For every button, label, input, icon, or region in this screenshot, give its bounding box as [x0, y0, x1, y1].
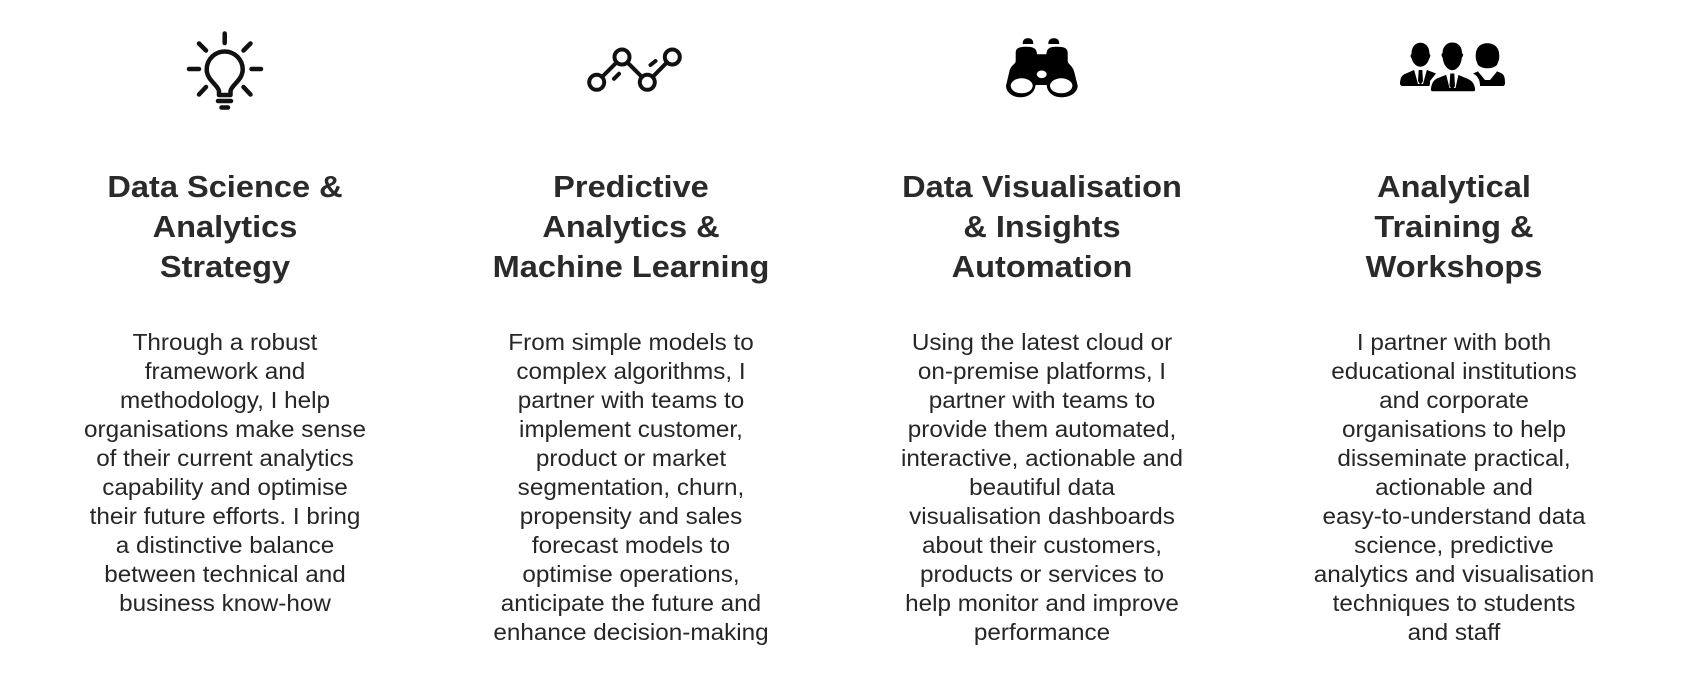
column 3 text: provide them automated,: [908, 416, 1176, 442]
column 1 text: business know-how: [119, 590, 330, 616]
column 1 text: organisations make sense: [84, 416, 365, 442]
column 2 text: segmentation, churn,: [518, 474, 744, 500]
column 1 heading: Strategy: [159, 249, 290, 284]
column 3 heading: Data Visualisation: [902, 169, 1182, 204]
column 4 text: disseminate practical,: [1337, 445, 1571, 471]
column 4 text: [1314, 329, 1594, 645]
column 3 text: performance: [974, 619, 1110, 645]
column 4 text: science, predictive: [1354, 532, 1554, 558]
column 2 heading: [493, 169, 769, 284]
column 3 text: beautiful data: [969, 474, 1115, 500]
column 3 text: on-premise platforms, I: [918, 358, 1166, 384]
column 2 heading: Predictive: [553, 169, 709, 204]
column 1 text: Through a robust: [132, 329, 317, 355]
column 3 heading: [902, 169, 1182, 284]
column 4 heading: Analytical: [1377, 169, 1531, 204]
column 4 text: and corporate: [1379, 387, 1529, 413]
column 1 text: between technical and: [104, 561, 345, 587]
column 3 text: Using the latest cloud or: [912, 329, 1172, 355]
column 3 text: interactive, actionable and: [901, 445, 1183, 471]
column 3 text: partner with teams to: [929, 387, 1155, 413]
column 4 text: educational institutions: [1331, 358, 1577, 384]
left man: [1400, 43, 1436, 86]
icon: binoculars: [1006, 38, 1078, 97]
column 1 text: [84, 329, 365, 616]
column 2 heading: Analytics &: [542, 209, 720, 244]
column 2 text: anticipate the future and: [501, 590, 761, 616]
column 4 heading: Training &: [1374, 209, 1534, 244]
column 4 text: I partner with both: [1357, 329, 1551, 355]
column 2 text: [493, 329, 769, 645]
column 3 heading: Automation: [952, 249, 1132, 284]
column 1 text: of their current analytics: [96, 445, 353, 471]
icons row: [186, 31, 1505, 110]
column 2 text: complex algorithms, I: [516, 358, 746, 384]
column 4 heading: Workshops: [1366, 249, 1542, 284]
centre man: [1430, 42, 1476, 92]
column 4 heading: [1366, 169, 1542, 284]
column 3 text: [901, 329, 1183, 645]
woman: [1473, 43, 1505, 86]
column 4 text: analytics and visualisation: [1314, 561, 1594, 587]
icon: three business people: [1400, 42, 1505, 92]
column 2 heading: Machine Learning: [493, 249, 769, 284]
column 2 text: partner with teams to: [518, 387, 744, 413]
column 1 text: a distinctive balance: [115, 532, 334, 558]
column 3 text: help monitor and improve: [905, 590, 1179, 616]
column 2 text: product or market: [536, 445, 726, 471]
column 1 text: methodology, I help: [119, 387, 329, 413]
column 4 text: easy-to-understand data: [1322, 503, 1586, 529]
column 4 text: organisations to help: [1342, 416, 1566, 442]
column 1 heading: Data Science &: [107, 169, 342, 204]
column 1 heading: [107, 169, 342, 284]
column 2 text: propensity and sales: [520, 503, 742, 529]
column 2 text: From simple models to: [508, 329, 754, 355]
column 3 text: products or services to: [920, 561, 1164, 587]
column 3 text: about their customers,: [922, 532, 1162, 558]
column 3 heading: & Insights: [963, 209, 1121, 244]
column 2 text: forecast models to: [532, 532, 730, 558]
column 2 text: optimise operations,: [522, 561, 740, 587]
column 1 text: their future efforts. I bring: [89, 503, 360, 529]
column 2 text: implement customer,: [519, 416, 743, 442]
column 2 text: enhance decision-making: [493, 619, 769, 645]
icon: line chart: [589, 50, 680, 90]
column 4 text: techniques to students: [1333, 590, 1575, 616]
column 4 text: actionable and: [1375, 474, 1533, 500]
column 4 text: and staff: [1408, 619, 1500, 645]
column 1 heading: Analytics: [152, 209, 297, 244]
icon: light bulb: [189, 34, 261, 108]
column 1 text: capability and optimise: [102, 474, 347, 500]
column 1 text: framework and: [144, 358, 305, 384]
column 3 text: visualisation dashboards: [909, 503, 1175, 529]
